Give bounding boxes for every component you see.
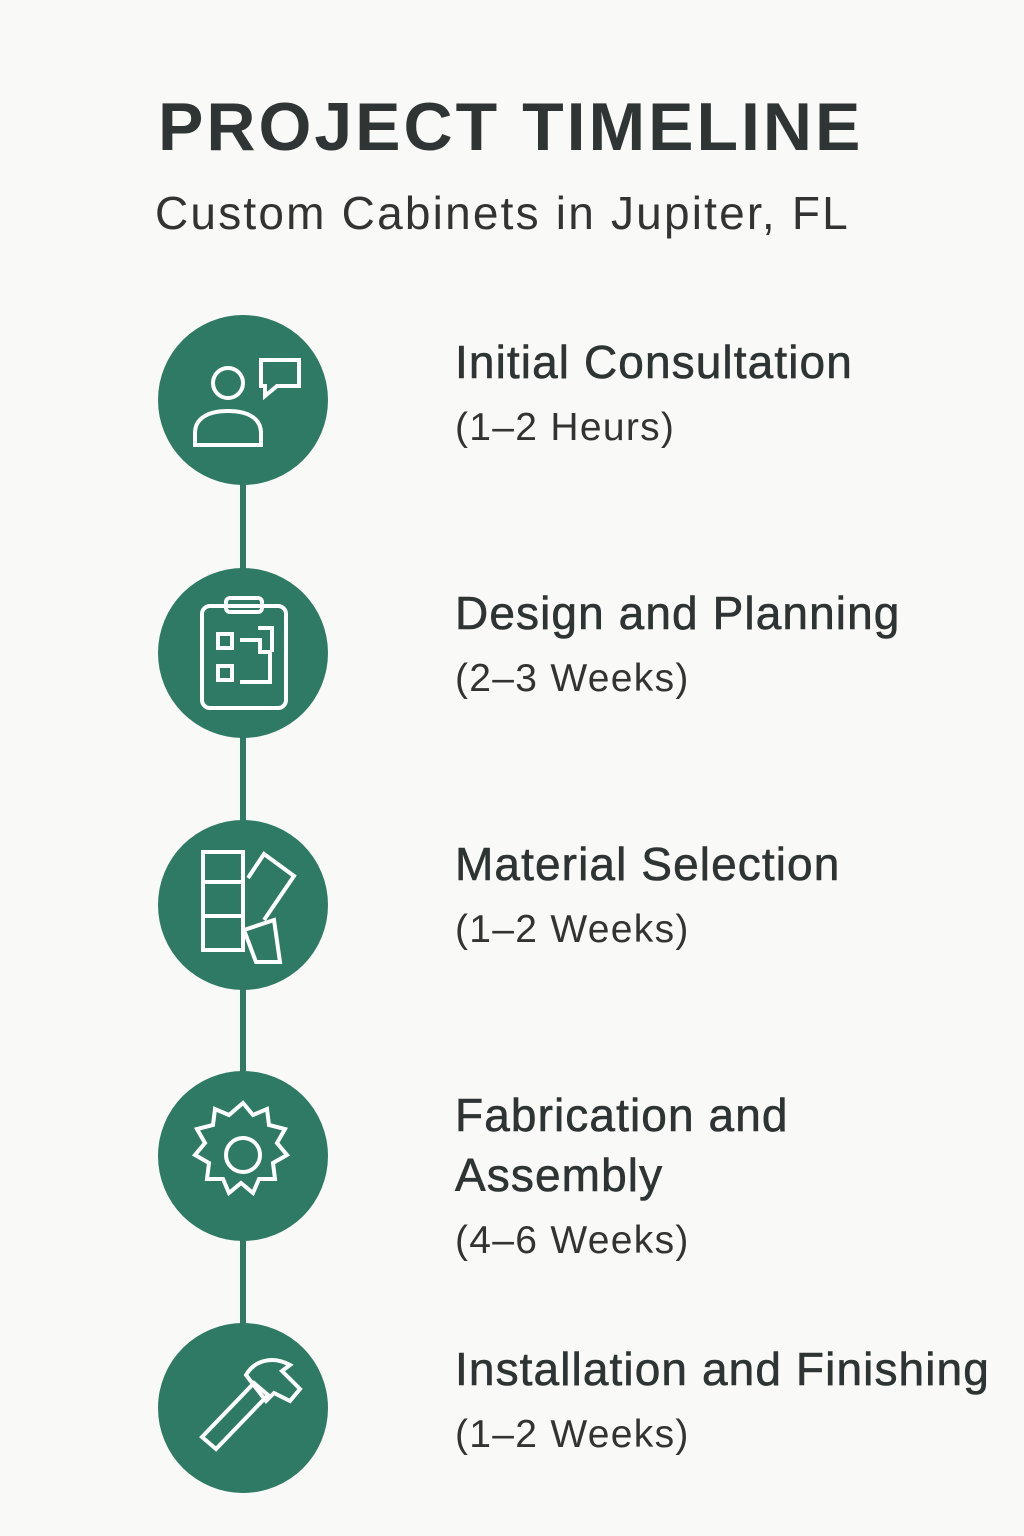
- step 1: Initial Consultation: [455, 336, 853, 388]
- step 4: Fabrication and: [455, 1089, 789, 1141]
- step 3: [455, 838, 840, 951]
- step 5: (1–2 Weeks): [455, 1413, 690, 1456]
- step 4: (4–6 Weeks): [455, 1219, 690, 1262]
- step 4: [454, 1089, 789, 1262]
- icon: consultation: [158, 315, 328, 485]
- step 2: [455, 587, 900, 700]
- icon: material: [158, 820, 328, 990]
- step 2: (2–3 Weeks): [455, 657, 690, 700]
- timeline connector: [240, 480, 246, 1340]
- step 1: [455, 336, 853, 449]
- step 4: Assembly: [455, 1149, 663, 1201]
- step 3: (1–2 Weeks): [455, 908, 690, 951]
- subtitle: Custom Cabinets in Jupiter, FL: [155, 187, 850, 239]
- step 3: Material Selection: [455, 838, 840, 890]
- icon: hammer: [158, 1323, 328, 1493]
- step 2: Design and Planning: [455, 587, 900, 639]
- step 1: (1–2 Heurs): [455, 406, 675, 449]
- icon: saw blade: [158, 1071, 328, 1241]
- title: PROJECT TIMELINE: [158, 89, 863, 165]
- step 5: [455, 1343, 990, 1456]
- icon: design: [158, 568, 328, 738]
- step 5: Installation and Finishing: [455, 1343, 990, 1395]
